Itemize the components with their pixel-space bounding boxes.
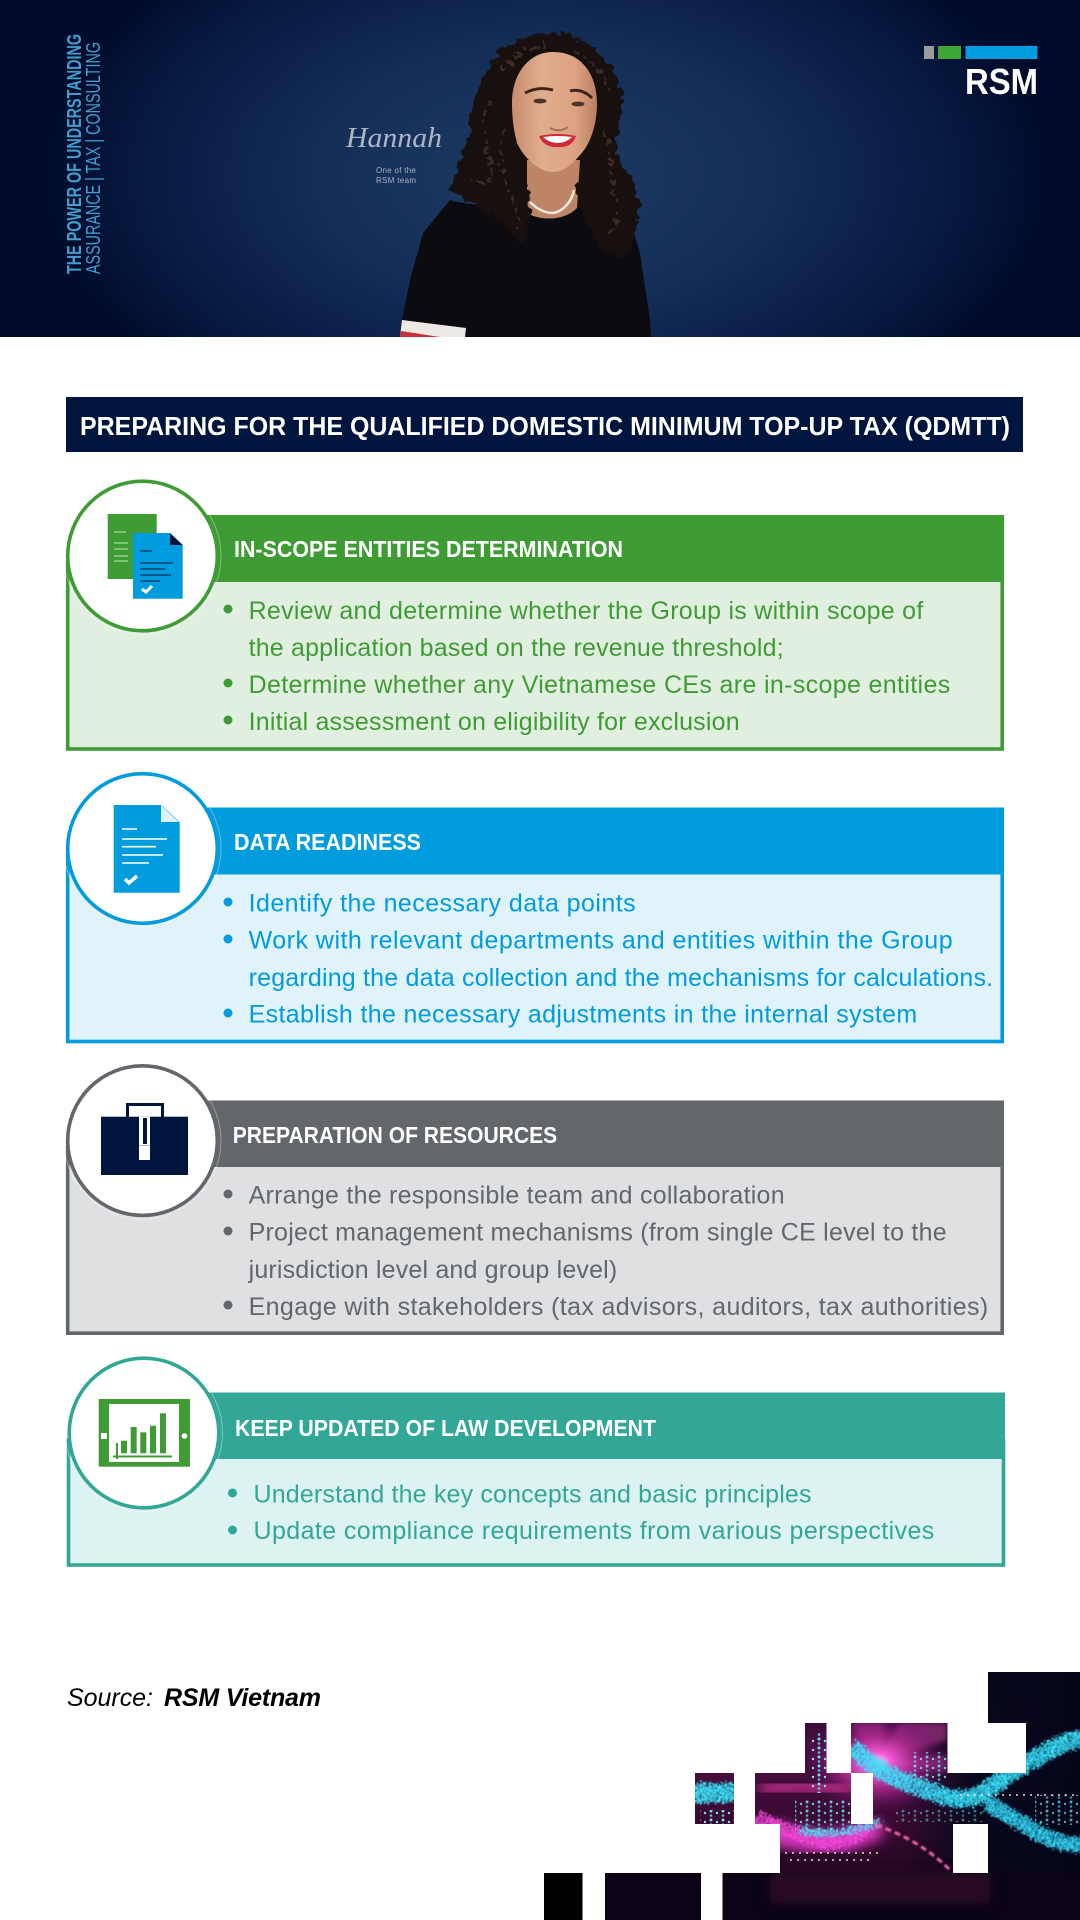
header: data readiness bbox=[144, 808, 1004, 874]
panel: keep updated of law development bbox=[66, 1354, 1005, 1565]
icon: tablet with bar chart bbox=[66, 1354, 222, 1512]
text: resources bullets: Project management mechanisms (from single CE level to the bbox=[249, 1219, 947, 1247]
text: data readiness bullets: Identify the necessary data points bbox=[249, 890, 636, 918]
panel: data readiness bbox=[64, 770, 1004, 1042]
text: in-scope bullets bbox=[224, 597, 950, 736]
header: in-scope bbox=[144, 515, 1004, 582]
signature Hannah: One of the bbox=[376, 166, 417, 175]
text: data readiness bullets: Work with relevant departments and entities within the Group bbox=[249, 927, 953, 955]
tagline vertical text bbox=[64, 34, 105, 274]
icon: document with checkmark bbox=[64, 770, 221, 927]
source line bbox=[67, 1684, 321, 1712]
header: in-scope: IN-SCOPE ENTITIES DETERMINATION bbox=[234, 536, 623, 562]
text: in-scope bullets: the application based on the revenue threshold; bbox=[249, 634, 784, 662]
RSM logo: RSM bbox=[965, 61, 1038, 102]
text: data readiness bullets: Establish the necessary adjustments in the internal system bbox=[249, 1001, 917, 1029]
header: data readiness: DATA READINESS bbox=[234, 829, 421, 855]
portrait bbox=[400, 33, 651, 337]
text: in-scope bullets: Review and determine whether the Group is within scope of bbox=[249, 597, 923, 625]
text: data readiness bullets bbox=[224, 890, 993, 1029]
text: resources bullets bbox=[224, 1182, 988, 1321]
panel: in-scope entities determination bbox=[64, 478, 1004, 749]
signature Hannah: RSM team bbox=[376, 176, 416, 185]
source line: Source: bbox=[67, 1684, 153, 1712]
source line: RSM Vietnam bbox=[164, 1684, 321, 1712]
signature Hannah bbox=[345, 123, 442, 185]
text: resources bullets: Engage with stakeholders (tax advisors, auditors, tax authorities) bbox=[249, 1293, 988, 1321]
text: data readiness bullets: regarding the data collection and the mechanisms for calculations. bbox=[249, 964, 993, 992]
header: keep updated bbox=[145, 1392, 1005, 1459]
header: keep updated: KEEP UPDATED OF LAW DEVELOPMENT bbox=[235, 1415, 656, 1441]
title bar bbox=[66, 397, 1023, 452]
header: preparation of resources bbox=[144, 1100, 1004, 1167]
text: resources bullets: Arrange the responsible team and collaboration bbox=[249, 1182, 785, 1210]
text: resources bullets: jurisdiction level and group level) bbox=[248, 1256, 617, 1284]
decorative pixel image bbox=[540, 1670, 1080, 1920]
header: preparation of resources: PREPARATION OF RESOURCES bbox=[233, 1122, 557, 1148]
text: in-scope bullets: Initial assessment on eligibility for exclusion bbox=[249, 708, 740, 736]
text: keep updated bullets: Update compliance requirements from various perspectives bbox=[254, 1517, 934, 1545]
signature Hannah: Hannah bbox=[345, 123, 442, 154]
title bar: PREPARING FOR THE QUALIFIED DOMESTIC MINIMUM TOP-UP TAX (QDMTT) bbox=[80, 411, 1010, 441]
text: keep updated bullets bbox=[228, 1481, 934, 1545]
text: in-scope bullets: Determine whether any Vietnamese CEs are in-scope entities bbox=[249, 671, 950, 699]
RSM logo bbox=[924, 46, 1038, 102]
text: keep updated bullets: Understand the key concepts and basic principles bbox=[254, 1481, 812, 1509]
panel: preparation of resources bbox=[64, 1062, 1004, 1333]
hero banner bbox=[0, 0, 1080, 337]
icon: two documents bbox=[64, 478, 221, 634]
icon: briefcase bbox=[64, 1062, 221, 1219]
